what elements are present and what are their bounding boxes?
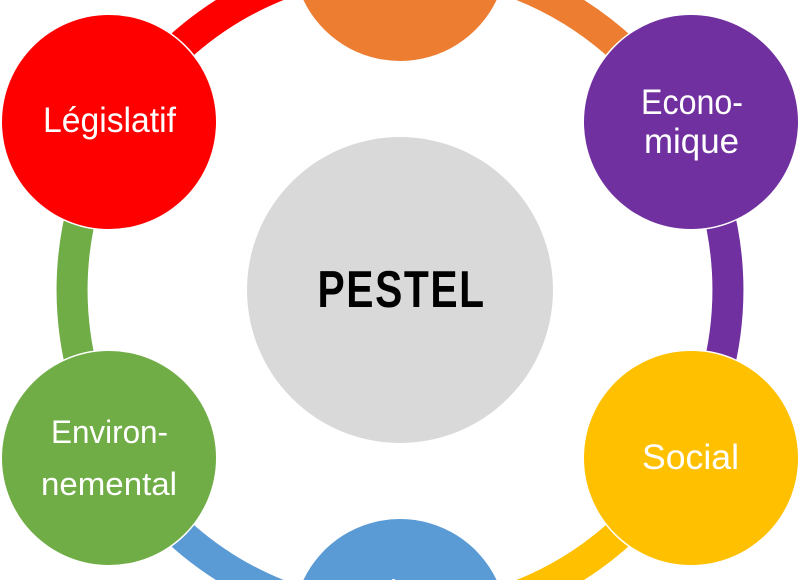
node: Social [584,351,798,565]
node: Législatif [2,15,216,229]
node: Economique: mique [644,122,739,161]
node: bottom, cropped by the frame [303,519,497,580]
arc: Social to bottom node [516,446,698,580]
node: Législatif: Législatif [43,101,176,140]
center node: PESTEL [247,137,553,443]
node: top, cropped by the frame [303,0,497,61]
arc: Economique to Social [684,126,728,454]
arc: top node to Economique [516,0,698,134]
label fragment at the crop edge [392,579,395,580]
arc: Législatif to top node [102,0,284,134]
arc: Environnemental to Législatif [72,126,116,454]
node: Economique [584,15,798,229]
node: Environnemental: nemental [41,466,177,502]
node: Economique: Econo- [641,83,743,122]
node: Environnemental: Environ- [51,414,168,450]
node: Environnemental [2,351,216,565]
arc: bottom node to Environnemental [102,446,284,580]
node: Social: Social [642,438,739,477]
center node: PESTEL: PESTEL [318,260,486,318]
